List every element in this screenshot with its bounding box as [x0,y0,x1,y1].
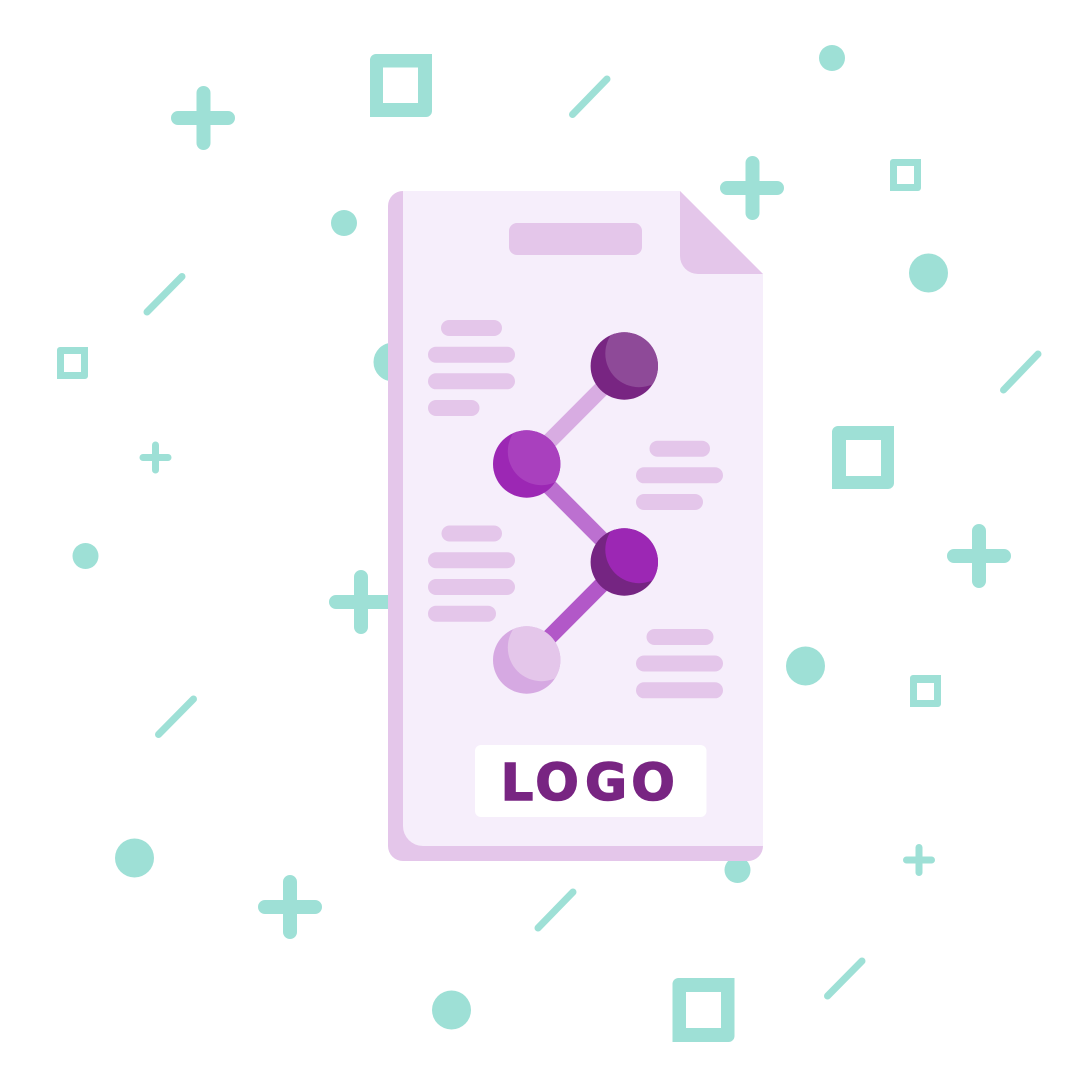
logo text: LOGO [501,754,675,813]
text block: lower right [636,629,723,698]
text block: top left [428,320,515,416]
page front sheet [403,191,763,846]
decorative plus signs [143,93,1004,932]
logo plate [475,745,706,817]
title placeholder [509,223,642,255]
background decorations [57,45,948,1042]
page back edge [388,191,763,861]
node 2 [493,430,560,498]
folded corner [680,191,763,274]
document page [388,191,763,861]
node 3 [590,528,658,596]
connector lines [527,366,624,660]
node 4 [493,626,560,694]
decorative circles [72,45,948,1030]
decorative squares [57,54,941,1042]
text block: lower left [428,526,515,622]
decorative slashes [147,79,1038,996]
node 1 [590,332,658,400]
text block: middle right [636,441,723,510]
